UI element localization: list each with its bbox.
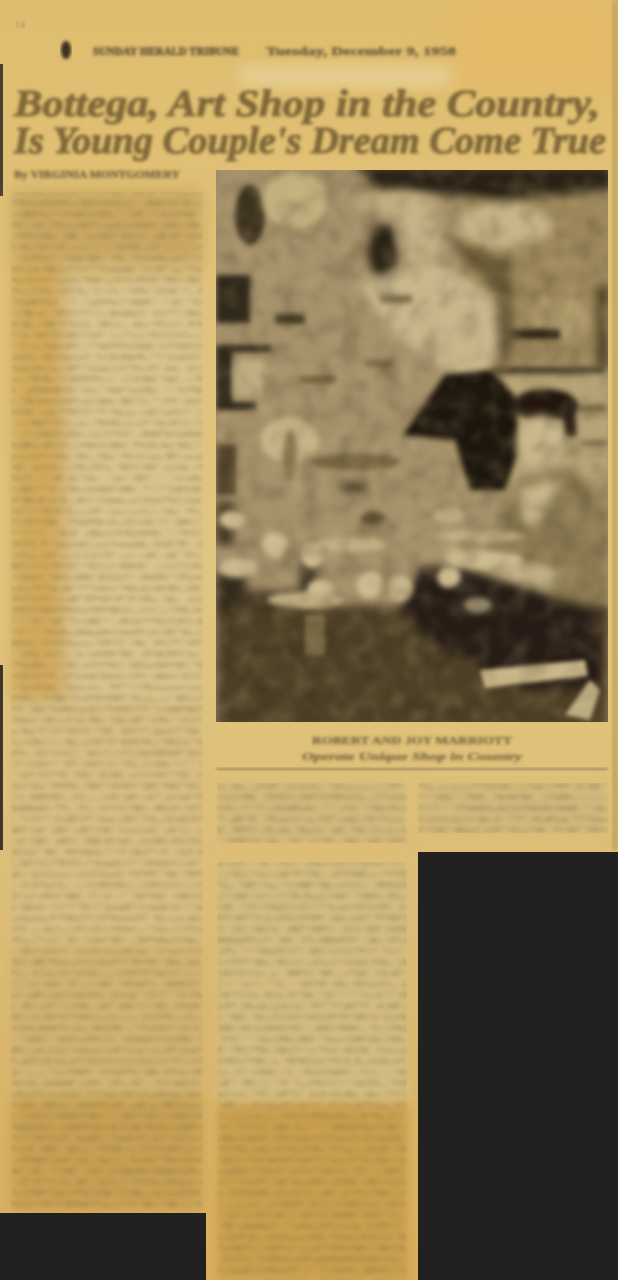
light bar and lower detail [305,615,600,720]
text lines [418,783,608,833]
headline [13,83,606,162]
dark coat and seated woman [403,370,578,490]
icon: page marker [61,41,71,59]
lower text lines [217,862,407,1280]
column tone patches [218,782,408,1280]
middle article column [217,782,408,1280]
wall and top shadow [355,165,612,370]
left article column [11,190,203,1213]
caption line: Operate Unique Shop in Country [302,751,522,763]
left edge dark strips [0,64,3,850]
column tone [420,783,606,833]
masked block: lower right [418,852,618,1280]
column tone patches [12,190,202,1213]
paper name: SUNDAY HERALD TRIBUNE [93,44,239,58]
masked block: lower left [0,1213,206,1280]
upper text lines [217,783,407,843]
column rule [216,768,608,770]
standing figure [355,190,515,395]
headline line 2: Is Young Couple's Dream Come True [13,120,606,162]
headline line 1: Bottega, Art Shop in the Country, [13,83,600,125]
photo grain dark [216,170,608,722]
photo: couple with ornaments in shop [216,165,612,730]
byline: By VIRGINIA MONTGOMERY [14,170,181,181]
photo grain light [216,170,608,722]
masthead [15,20,456,59]
left shelf with ornaments [216,172,412,495]
caption name: ROBERT AND JOY MARRIOTT [312,736,512,747]
date: Tuesday, December 9, 1958 [266,44,456,58]
photo caption [302,736,522,763]
page number: 14 [15,20,25,31]
right article column [418,783,608,833]
shop shelves [490,329,610,480]
column text lines [11,192,203,1210]
table with ornaments [216,482,608,730]
ornament highlights [218,507,526,613]
